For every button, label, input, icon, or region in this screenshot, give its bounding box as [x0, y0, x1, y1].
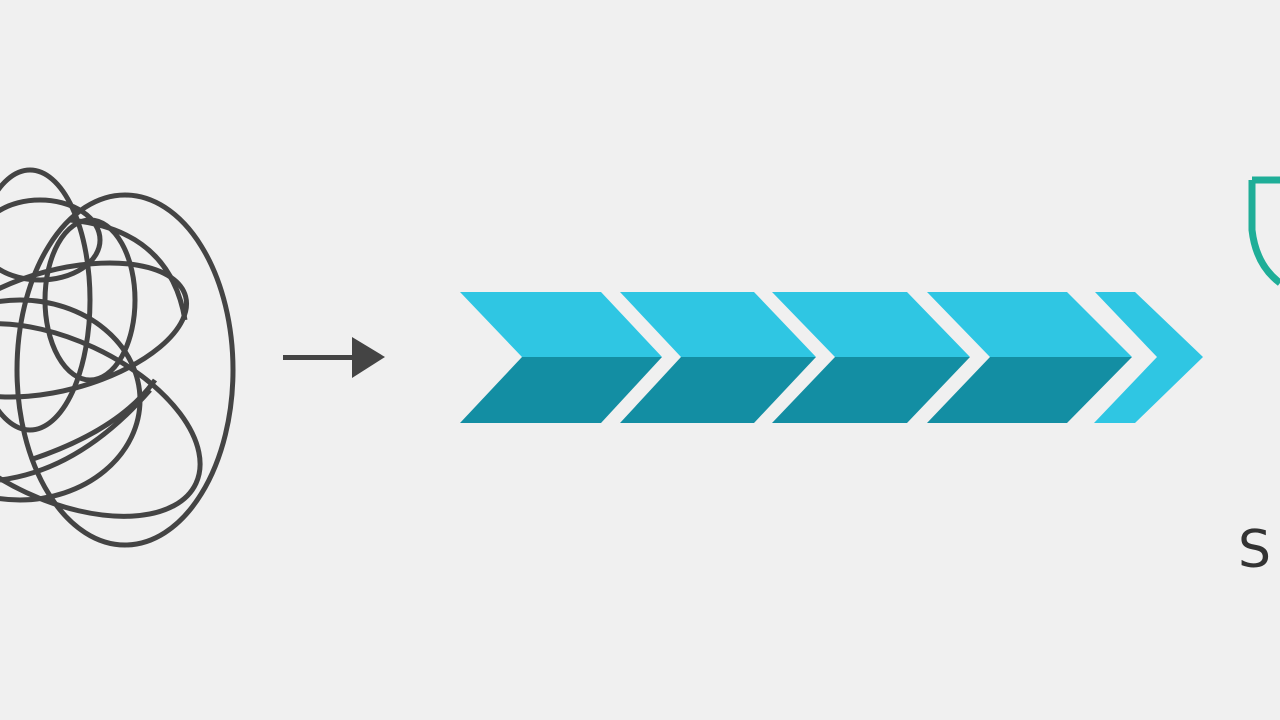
icon: shield (partial)	[1252, 180, 1280, 283]
icon: tangled scribble	[0, 170, 233, 556]
chevron process arrows	[460, 292, 1203, 423]
arrow: scribble to process	[283, 337, 385, 378]
text: S label: S	[1238, 520, 1271, 580]
